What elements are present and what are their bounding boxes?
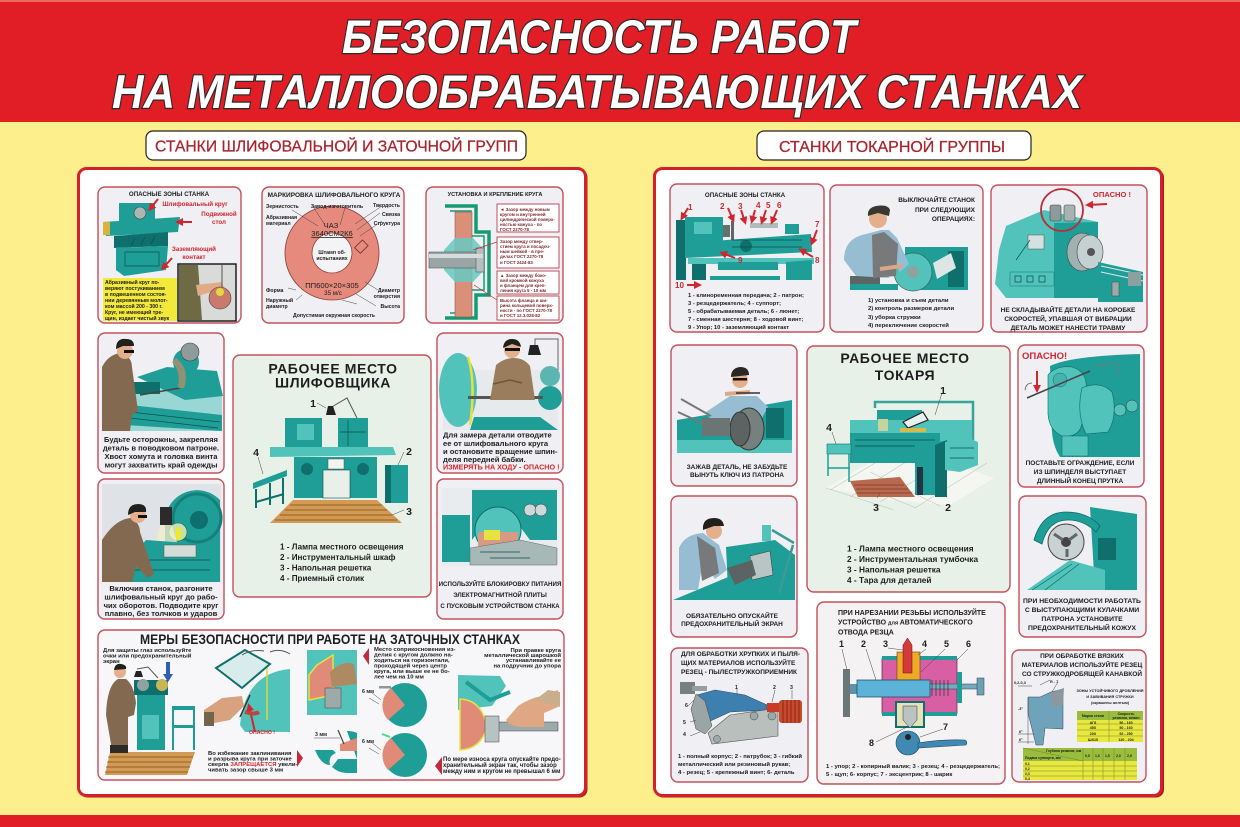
caption: ИСПОЛЬЗУЙТЕ БЛОКИРОВКУ ПИТАНИЯ bbox=[439, 581, 561, 588]
caption: СКОРОСТЕЙ, УПАВШАЯ ОТ ВИБРАЦИИ bbox=[1004, 314, 1132, 323]
board: grinding machines bbox=[78, 168, 588, 798]
legend: 5 - щуп; 6- корпус; 7 - эксцентрик; 8 - шарик bbox=[826, 772, 952, 778]
gap labels: 6 мм bbox=[362, 689, 374, 695]
caption: НЕ СКЛАДЫВАЙТЕ ДЕТАЛИ НА КОРОБКЕ bbox=[1001, 307, 1135, 314]
heading: для АВТОМАТИЧЕСКОГО bbox=[888, 620, 973, 626]
marking labels: Зернистость bbox=[266, 204, 299, 210]
legend: 1 - Лампа местного освещения bbox=[280, 542, 403, 552]
panel: clamping workpiece bbox=[98, 333, 224, 473]
chip zones caption: (окрашены желтым) bbox=[1091, 701, 1130, 705]
grinding wheel diagram: 35 м/с bbox=[324, 290, 342, 297]
caption: ДЛИННЫЙ КОНЕЦ ПРУТКА bbox=[1037, 476, 1123, 485]
mounting notes: ◄ Зазор между новым bbox=[500, 207, 550, 212]
caption: ПРЕДОХРАНИТЕЛЬНЫЙ КОЖУХ bbox=[1028, 623, 1137, 632]
yellow warning note: Абразивный круг по- bbox=[105, 280, 159, 286]
heading: ДЛЯ ОБРАБОТКИ ХРУПКИХ И ПЫЛЯ- bbox=[681, 651, 800, 658]
list of operations: 4) переключение скоростей bbox=[868, 322, 949, 329]
blue down arrow bbox=[163, 662, 173, 682]
panel: switch off the lathe bbox=[830, 185, 983, 332]
mounting notes: ностью кожуха - по bbox=[500, 222, 542, 227]
mounting notes: делах ГОСТ 2270-78 bbox=[500, 254, 544, 259]
guard lowering note: хранительный экран так, чтобы зазор bbox=[443, 762, 557, 769]
heading: ОПАСНЫЕ ЗОНЫ СТАНКА bbox=[705, 192, 786, 199]
danger numbers: 5 bbox=[766, 201, 771, 210]
mounting notes: Зазор между отвер- bbox=[500, 239, 544, 244]
callout numbers: 4 bbox=[826, 422, 832, 434]
gap labels: 3 мм bbox=[315, 732, 327, 738]
clogging note: сверла bbox=[208, 762, 230, 768]
worker measuring illustration bbox=[439, 339, 562, 430]
danger labels: стол bbox=[212, 219, 226, 226]
workplace illustration bbox=[826, 393, 994, 510]
list of operations: 3) уборка стружки bbox=[868, 314, 921, 321]
caption: ДЕТАЛЬ МОЖЕТ НАНЕСТИ ТРАВМУ bbox=[1011, 325, 1126, 332]
mounting notes: ным шейкой - в пре- bbox=[500, 249, 545, 254]
tool rest note: металлической шарошкой bbox=[484, 652, 561, 659]
contact point note: Место соприкосновения из- bbox=[374, 647, 455, 653]
marker triangle bbox=[297, 750, 303, 767]
caption: С ПУСКОВЫМ УСТРОЙСТВОМ СТАНКА bbox=[440, 602, 560, 610]
heading: ВЫКЛЮЧАЙТЕ СТАНОК bbox=[898, 197, 975, 204]
heading: РЕЗЕЦ - ПЫЛЕСТРУЖКОПРИЕМНИК bbox=[681, 669, 797, 676]
cutter dimensions: -3° bbox=[1018, 707, 1023, 711]
callout numbers: 1 bbox=[940, 385, 946, 397]
depth and feed table: 2,5 bbox=[1127, 754, 1132, 758]
clogging note: чивать зазор свыше 3 мм bbox=[208, 768, 283, 774]
callout numbers: 2 bbox=[945, 502, 951, 514]
worker tightening chuck illustration bbox=[677, 367, 792, 453]
title line 2: НА МЕТАЛЛООБРАБАТЫВАЮЩИХ СТАНКАХ bbox=[112, 65, 1084, 118]
panel: do not store parts on the gearbox bbox=[991, 185, 1147, 332]
caption: ПРИ НЕОБХОДИМОСТИ РАБОТАТЬ bbox=[1023, 598, 1141, 605]
callout numbers: 4 bbox=[683, 732, 686, 738]
title banner bbox=[0, 0, 1240, 122]
bottom band bbox=[0, 815, 1240, 827]
contact point note: проходящей через центр bbox=[374, 662, 447, 670]
danger labels: Шлифовальный круг bbox=[162, 201, 228, 208]
panel: long bar end guard bbox=[1018, 345, 1144, 487]
legend: 3 - Напольная решетка bbox=[847, 564, 941, 574]
yellow warning note: веряют постукиванием bbox=[105, 286, 165, 292]
heading: МАТЕРИАЛОВ ИСПОЛЬЗУЙТЕ РЕЗЕЦ bbox=[1022, 660, 1142, 669]
legend: 2 - Инструментальный шкаф bbox=[280, 553, 395, 562]
legend: 4 - Тара для деталей bbox=[847, 575, 931, 585]
danger numbers: 2 bbox=[720, 202, 725, 211]
callout numbers: 4 bbox=[922, 639, 927, 649]
mounting notes: ГОСТ 2270-78 bbox=[500, 227, 529, 232]
legend: 4 - Приемный столик bbox=[280, 574, 365, 583]
tab: turning group: СТАНКИ ТОКАРНОЙ ГРУППЫ bbox=[779, 137, 1005, 156]
cutter illustration bbox=[680, 682, 802, 744]
steel grades table: 45Х bbox=[1090, 726, 1097, 730]
callout numbers: 1 bbox=[735, 685, 738, 691]
panel: turner's workplace: ТОКАРЯ bbox=[875, 367, 935, 383]
panel: measuring bbox=[437, 333, 563, 473]
clogging note: и разрыва круга при заточке bbox=[208, 756, 292, 762]
panel: thread cutting device bbox=[817, 602, 1005, 784]
depth and feed table: 0,1 bbox=[1025, 762, 1030, 766]
steel grades table: 92 - 250 bbox=[1119, 732, 1133, 736]
steel grades table: 20Х bbox=[1090, 732, 1097, 736]
depth and feed table: 0,2 bbox=[1025, 767, 1030, 771]
marker triangle bbox=[435, 757, 442, 775]
callout numbers: 4 bbox=[253, 447, 259, 459]
workplace illustration bbox=[253, 398, 408, 523]
legend: 1 - Лампа местного освещения bbox=[847, 544, 974, 554]
depth and feed table: 0,5 bbox=[1085, 754, 1090, 758]
callout numbers: 3 bbox=[406, 506, 412, 518]
heading: МАРКИРОВКА ШЛИФОВАЛЬНОГО КРУГА bbox=[268, 192, 401, 199]
worker at surface grinder illustration bbox=[102, 484, 221, 582]
grinding wheel diagram: испытаниях bbox=[316, 256, 348, 262]
wheel and drill close-up bbox=[307, 650, 357, 715]
cutter dimensions: 0,2-0,3 bbox=[1014, 681, 1026, 685]
lathe operator illustration bbox=[844, 206, 968, 291]
headstock illustration bbox=[995, 210, 1143, 302]
gap diagrams bbox=[314, 683, 427, 777]
title line 1: БЕЗОПАСНОСТЬ РАБОТ bbox=[342, 10, 860, 63]
marking labels: диаметр bbox=[266, 304, 288, 310]
heading: ОПЕРАЦИЯХ: bbox=[932, 216, 975, 223]
grinding wheel diagram: Штамп об- bbox=[318, 250, 346, 256]
depth and feed table: 0,4 bbox=[1025, 777, 1030, 781]
heading: РАБОЧЕЕ МЕСТО bbox=[268, 360, 398, 376]
cutter dimensions: 6° bbox=[1019, 738, 1023, 742]
grinding wheel diagram: ЧАЗ bbox=[324, 221, 339, 230]
legend: 3 - резцедержатель; 4 - суппорт; bbox=[688, 301, 781, 307]
marking labels: Абразивная bbox=[266, 214, 297, 221]
danger numbers: 6 bbox=[777, 201, 782, 210]
inset: testing the wheel bbox=[178, 264, 236, 321]
hand adjusting the guard illustration bbox=[204, 650, 290, 732]
panel: grinding wheel marking: Завод-изготовитель bbox=[311, 204, 363, 210]
marker triangle bbox=[363, 648, 369, 665]
danger labels: Подвижной bbox=[201, 211, 237, 218]
callout numbers: 1 bbox=[839, 639, 844, 649]
legend: 7 - сменная шестерня; 8 - ходовой винт; bbox=[688, 316, 803, 323]
steel grades table bbox=[1077, 711, 1143, 742]
yellow warning note: в подвешенном состоя- bbox=[105, 292, 166, 298]
worker at cylindrical grinder illustration bbox=[102, 339, 223, 431]
callout numbers: 3 bbox=[790, 685, 793, 691]
chuck with guard illustration bbox=[1027, 507, 1137, 590]
mounting notes: ления круга 5 - 10 мм bbox=[500, 288, 546, 293]
steel grades table: 56 - 160 bbox=[1119, 721, 1133, 725]
legend: 9 - Упор; 10 - заземляющий контакт bbox=[688, 324, 789, 331]
caption: ЭЛЕКТРОМАГНИТНОЙ ПЛИТЫ bbox=[453, 591, 547, 599]
callout numbers: 8 bbox=[869, 738, 874, 748]
danger arrows bbox=[150, 199, 192, 268]
caption: могут захватить край одежды bbox=[105, 460, 217, 470]
danger numbers: 4 bbox=[756, 201, 761, 210]
chip zones caption: ЗОНЫ УСТОЙЧИВОГО ДРОБЛЕНИЯ bbox=[1076, 689, 1144, 693]
callout numbers: 1 bbox=[310, 398, 316, 410]
heading: ОПАСНЫЕ ЗОНЫ СТАНКА bbox=[129, 191, 210, 198]
panel: starting the grinder bbox=[98, 479, 224, 619]
cutter dimensions: 6° bbox=[1019, 730, 1023, 734]
callout numbers: 2 bbox=[406, 446, 412, 458]
tool rest note: устанавливайте ее bbox=[506, 657, 562, 664]
heading: ЩИХ МАТЕРИАЛОВ ИСПОЛЬЗУЙТЕ bbox=[681, 658, 796, 667]
surface grinder illustration bbox=[103, 203, 180, 276]
danger numbers: 8 bbox=[815, 256, 820, 265]
danger numbers: 9 bbox=[738, 256, 743, 265]
panel: safety on sharpening machines bbox=[98, 630, 564, 780]
caption: Для замера детали отводите bbox=[443, 430, 552, 440]
danger numbers: 3 bbox=[738, 202, 743, 211]
legend: металлический или резиновый рукав; bbox=[678, 761, 790, 768]
caption: ее от шлифовального круга bbox=[443, 439, 549, 448]
mounting notes: и ГОСТ 12.3.028-82 bbox=[500, 313, 541, 318]
yellow warning note: Круг, не имеющий тре- bbox=[105, 309, 163, 316]
danger labels: Заземляющий bbox=[172, 246, 216, 253]
danger arrows bbox=[682, 208, 817, 285]
panel: turner's workplace bbox=[807, 346, 1010, 592]
callout numbers: 3 bbox=[883, 639, 888, 649]
caption: ОБЯЗАТЕЛЬНО ОПУСКАЙТЕ bbox=[686, 613, 778, 620]
eye protection note: очки или предохранительный bbox=[103, 652, 192, 660]
wheel mount cross-section bbox=[429, 206, 489, 318]
panel: wheel mounting bbox=[426, 187, 563, 323]
heading: РАБОЧЕЕ МЕСТО bbox=[840, 350, 970, 366]
panel: grinder's workplace bbox=[233, 355, 431, 597]
board: lathes bbox=[654, 168, 1164, 798]
panel: lathe danger zones bbox=[670, 184, 824, 332]
danger labels: контакт bbox=[182, 254, 206, 261]
steel grades table: Марка стали bbox=[1082, 714, 1104, 718]
panel: grinding wheel marking: Связка bbox=[382, 212, 400, 218]
grinding wheel diagram: ПП600×20×305 bbox=[305, 281, 359, 290]
contact point note: лее чем на 10 мм bbox=[374, 674, 424, 680]
callout numbers: 7 bbox=[943, 722, 948, 732]
mounting notes: кругом и внутренней bbox=[500, 212, 546, 217]
grinding wheel diagram bbox=[285, 206, 379, 300]
grinder head and magnetic plate illustration bbox=[442, 488, 557, 566]
caption: деля передней бабки. bbox=[443, 455, 526, 464]
contact point note: круга, или выше ее не бо- bbox=[374, 668, 450, 675]
device cross-section bbox=[842, 638, 984, 755]
contact point note: ходиться на горизонтали, bbox=[374, 658, 450, 664]
caption: ЗАЖАВ ДЕТАЛЬ, НЕ ЗАБУДЬТЕ bbox=[687, 464, 787, 471]
panel: grinding wheel marking: Диаметр bbox=[378, 288, 400, 294]
mounting notes: рина кольцевой поверх- bbox=[500, 303, 554, 308]
worker behind safety screen illustration bbox=[673, 518, 795, 600]
yellow warning note: ком массой 200 - 300 г. bbox=[105, 303, 163, 310]
tab: grinding group bbox=[146, 131, 526, 160]
caption: шлифовальный круг до рабо- bbox=[104, 592, 218, 602]
callout numbers: 6 bbox=[685, 703, 688, 709]
worker at bench grinder illustration bbox=[105, 664, 195, 775]
depth and feed table: Подача суппорта, мм bbox=[1025, 756, 1061, 760]
lathe illustration bbox=[676, 217, 814, 280]
steel grades table: ШХ15 bbox=[1088, 738, 1098, 742]
callout numbers: 3 bbox=[873, 502, 879, 514]
cutter profile bbox=[1018, 680, 1064, 745]
clogging note: ЗАПРЕЩАЕТСЯ увели- bbox=[230, 762, 298, 768]
callout numbers: 2 bbox=[861, 639, 866, 649]
contact point note: делия с кругом должно на- bbox=[374, 652, 453, 658]
yellow warning note: нии деревянным молот- bbox=[105, 298, 168, 304]
yellow warning note bbox=[103, 278, 177, 322]
callout numbers: 6 bbox=[966, 639, 971, 649]
panel: chuck guard bbox=[1019, 496, 1146, 637]
caption: Хвост хомута и головка винта bbox=[104, 452, 218, 461]
steel grades table: резания, м/мин bbox=[1112, 716, 1140, 720]
legend: 5 - обрабатываемая деталь; 6 - люнет; bbox=[688, 308, 799, 315]
depth and feed table: 0,3 bbox=[1025, 772, 1030, 776]
depth and feed table: Глубина резания, мм bbox=[1046, 749, 1081, 753]
legend: 2 - Инструментальная тумбочка bbox=[847, 554, 978, 564]
danger numbers: 7 bbox=[815, 220, 820, 229]
caption: Включив станок, разгоните bbox=[109, 584, 213, 593]
tool rest note: При правке круга bbox=[511, 648, 561, 654]
caption: ИЗМЕРЯТЬ НА ХОДУ - ОПАСНО ! bbox=[443, 462, 559, 472]
legend: 3 - Напольная решетка bbox=[280, 564, 372, 572]
tab: grinding group: СТАНКИ ШЛИФОВАЛЬНОЙ И ЗАТОЧНОЙ ГРУПП bbox=[155, 136, 518, 156]
mounting notes bbox=[473, 204, 559, 320]
steel grades table: 50 - 160 bbox=[1119, 726, 1133, 730]
depth and feed table: 1,0 bbox=[1095, 754, 1100, 758]
heading: ПРИ НАРЕЗАНИИ РЕЗЬБЫ ИСПОЛЬЗУЙТЕ bbox=[838, 610, 986, 617]
heading: ОТВОДА РЕЗЦА bbox=[838, 630, 894, 636]
panel: grinding wheel marking: Допустимая окружная скорость bbox=[293, 313, 375, 319]
leader lines bbox=[288, 205, 382, 306]
marking labels: материал bbox=[266, 221, 291, 227]
red warning arrow bbox=[1036, 371, 1038, 390]
mounting notes: и фланцем для креп- bbox=[500, 283, 546, 288]
panel: grinder's workplace: ШЛИФОВЩИКА bbox=[275, 374, 391, 390]
eye protection note: Для защиты глаз используйте bbox=[103, 648, 191, 654]
clogging note: Во избежание заклинивания bbox=[208, 751, 291, 757]
panel: grinding wheel marking: Структура bbox=[374, 221, 400, 227]
danger numbers: 10 bbox=[675, 281, 685, 290]
danger circle with parts bbox=[1041, 189, 1107, 231]
panel: grinder danger zones bbox=[98, 187, 241, 323]
legend: 1 - клиноременная передача; 2 - патрон; bbox=[688, 293, 804, 299]
eye protection note: экран bbox=[103, 659, 120, 665]
warning label: ОПАСНО ! bbox=[1093, 190, 1131, 199]
wheel dressing illustration bbox=[458, 675, 560, 750]
heading: ПРИ СЛЕДУЮЩИХ bbox=[915, 207, 976, 214]
panel: remove the chuck key bbox=[671, 345, 797, 486]
heading: СО СТРУЖКОДРОБЯЩЕЙ КАНАВКОЙ bbox=[1022, 669, 1142, 678]
mounting notes: стием круга и посадоч- bbox=[500, 244, 551, 249]
danger numbers: 1 bbox=[688, 203, 693, 212]
mounting notes: вой кромкой кожуха bbox=[500, 278, 545, 283]
tab: turning group bbox=[757, 131, 1031, 160]
guard lowering note: По мере износа круга опускайте предо- bbox=[443, 757, 561, 763]
list of operations: 1) установка и съем детали bbox=[868, 298, 948, 304]
callout numbers: 5 bbox=[683, 720, 686, 726]
caption: ПАТРОНА УСТАНОВИТЕ bbox=[1041, 616, 1123, 623]
legend: 1 - упор; 2 - копирный валик; 3 - резец; 4 - резцедержатель; bbox=[826, 764, 1000, 770]
depth and feed table bbox=[1023, 748, 1137, 781]
mounting notes: ности - по ГОСТ 2270-78 bbox=[500, 308, 553, 313]
panel: grinding wheel marking: Высота bbox=[380, 304, 400, 310]
marking labels: Наружный bbox=[266, 297, 293, 304]
caption: ПРЕДОХРАНИТЕЛЬНЫЙ ЭКРАН bbox=[681, 619, 783, 628]
steel grades table: АГ8 bbox=[1090, 721, 1096, 725]
grinding wheel diagram: 3640СМ2К6 bbox=[311, 229, 353, 238]
panel: lower the screen bbox=[671, 496, 797, 637]
caption: ИЗ ШПИНДЕЛЯ ВЫСТУПАЕТ bbox=[1034, 469, 1126, 476]
legend: 1 - полный корпус; 2 - патрубок; 3 - гибкий bbox=[678, 754, 802, 760]
heading: УСТРОЙСТВО bbox=[838, 618, 888, 626]
caption: ПОСТАВЬТЕ ОГРАЖДЕНИЕ, ЕСЛИ bbox=[1026, 460, 1134, 467]
panel: grinding wheel marking bbox=[262, 187, 404, 323]
caption: С ВЫСТУПАЮЩИМИ КУЛАЧКАМИ bbox=[1025, 607, 1139, 614]
gap labels: 6 мм bbox=[362, 739, 374, 745]
steel grades table: Скорость bbox=[1118, 712, 1135, 716]
steel grades table: 120 - 204 bbox=[1118, 738, 1134, 742]
heading: УСТАНОВКА И КРЕПЛЕНИЕ КРУГА bbox=[448, 192, 542, 198]
caption: чих оборотов. Подводите круг bbox=[104, 601, 218, 610]
panel: dust collecting cutter bbox=[671, 648, 808, 782]
depth and feed table: 1,5 bbox=[1105, 754, 1110, 758]
chip zones caption: И ЗАВИВАНИЯ СТРУЖКИ bbox=[1086, 695, 1134, 699]
guard lowering note: между ним и кругом не превышал 6 мм bbox=[443, 769, 561, 775]
panel: grinding wheel marking: Твердость bbox=[373, 203, 400, 209]
mounting notes: Высота фланца и ши- bbox=[500, 298, 548, 303]
legend: 4 - резец; 5 - крепежный винт; 6- деталь bbox=[678, 769, 795, 776]
heading: ПРИ ОБРАБОТКЕ ВЯЗКИХ bbox=[1040, 653, 1124, 660]
yellow warning note: щин, издает чистый звук bbox=[105, 315, 170, 322]
caption: ВЫНУТЬ КЛЮЧ ИЗ ПАТРОНА bbox=[690, 472, 784, 479]
depth and feed table: 2,0 bbox=[1116, 754, 1121, 758]
panel: power interlock bbox=[437, 479, 563, 619]
mounting notes: ▲ Зазор между боко- bbox=[500, 273, 547, 278]
caption: Будьте осторожны, закрепляя bbox=[104, 435, 218, 444]
callout numbers: 5 bbox=[944, 639, 949, 649]
caption: плавно, без толчков и ударов bbox=[105, 609, 218, 618]
caption: и остановите вращение шпин- bbox=[443, 447, 558, 456]
mounting notes: и ГОСТ 2424-83 bbox=[500, 260, 533, 265]
caption: деталь в поводковом патроне. bbox=[103, 444, 219, 452]
mounting notes: цилиндрической поверх- bbox=[500, 217, 555, 222]
headstock with protruding bar illustration bbox=[1025, 354, 1140, 457]
heading: МЕРЫ БЕЗОПАСНОСТИ ПРИ РАБОТЕ НА ЗАТОЧНЫХ СТАНКАХ bbox=[140, 632, 520, 647]
callout numbers: 2 bbox=[773, 685, 776, 691]
panel: chip breaking cutter bbox=[1012, 650, 1146, 782]
panel: grinding wheel marking: отверстия bbox=[374, 294, 400, 300]
cutter dimensions: R - 7 bbox=[1050, 680, 1058, 684]
marking labels: Форма bbox=[266, 288, 283, 294]
tool rest note: на подручник до упора bbox=[493, 664, 562, 670]
warning label: ОПАСНО ! bbox=[249, 730, 275, 736]
warning label: ОПАСНО! bbox=[1022, 351, 1067, 362]
list of operations: 2) контроль размеров детали bbox=[868, 306, 954, 312]
